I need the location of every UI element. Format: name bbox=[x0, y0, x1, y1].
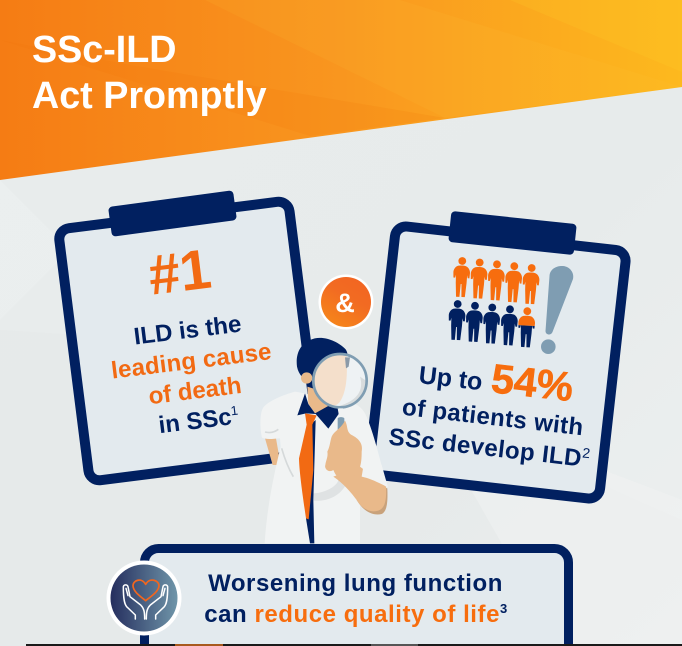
ampersand badge bbox=[318, 274, 374, 330]
coat folds bbox=[265, 429, 293, 477]
fist bbox=[325, 421, 362, 479]
panel: leading cause of death clipboard bbox=[58, 190, 320, 482]
hands bbox=[123, 585, 168, 619]
callout frame bbox=[144, 548, 568, 646]
icon: caring hands with heart bbox=[106, 560, 182, 636]
magnifier handle bbox=[339, 408, 343, 417]
subtitle: Act Promptly bbox=[32, 74, 267, 116]
clipboard frame right bbox=[368, 225, 627, 500]
text: of patients with SSc develop ILD: 2 bbox=[582, 444, 591, 461]
text: leading cause of death: of death bbox=[147, 372, 243, 410]
text: worsening lung function: Worsening lung function bbox=[208, 570, 503, 597]
icon: people 5.4 of 10 bbox=[448, 257, 540, 348]
shirt placket bbox=[306, 420, 316, 543]
stat: up to: Up to bbox=[417, 361, 484, 396]
text: leading cause of death: leading cause bbox=[110, 338, 273, 385]
ear bbox=[301, 372, 312, 384]
hair bbox=[297, 338, 348, 385]
text: reduce quality of life: 3 bbox=[500, 601, 508, 616]
text: leading cause of death: in SSc bbox=[157, 403, 233, 439]
tie bbox=[299, 413, 317, 519]
stat: 54%: 54% bbox=[489, 355, 576, 410]
collar bbox=[297, 393, 339, 429]
text: leading cause of death: 1 bbox=[230, 403, 239, 418]
stat: #1: #1 bbox=[145, 237, 214, 307]
bottom edge strip bbox=[26, 644, 682, 646]
icon: exclamation mark bbox=[541, 266, 573, 354]
white coat bbox=[260, 392, 387, 543]
clipboard clip left bbox=[108, 190, 237, 237]
forearm bbox=[333, 467, 386, 511]
text: reduce quality of life: can reduce quality of life bbox=[204, 601, 500, 628]
text: leading cause of death bbox=[106, 307, 280, 444]
text: of patients with SSc develop ILD: SSc develop ILD bbox=[387, 423, 583, 472]
ampersand badge: & bbox=[335, 288, 355, 318]
clipboard frame left bbox=[58, 200, 320, 482]
back arm bbox=[265, 438, 281, 465]
panel: quality of life bbox=[144, 548, 568, 646]
panel: 54 percent clipboard bbox=[368, 211, 627, 500]
heart bbox=[133, 580, 159, 601]
text: of patients with SSc develop ILD: of patients with bbox=[401, 394, 585, 441]
sleeve cuff bbox=[362, 465, 388, 487]
illustration: doctor with magnifying glass bbox=[260, 338, 388, 543]
arm shadow bbox=[357, 487, 387, 514]
clipboard clip right bbox=[448, 211, 577, 255]
title: SSc-ILD bbox=[32, 28, 176, 70]
orange header banner bbox=[0, 0, 682, 180]
neck bbox=[307, 387, 332, 414]
magnifying lens bbox=[312, 353, 370, 410]
text: of patients with SSc develop ILD bbox=[387, 393, 595, 473]
text: leading cause of death: ILD is the bbox=[132, 311, 243, 351]
